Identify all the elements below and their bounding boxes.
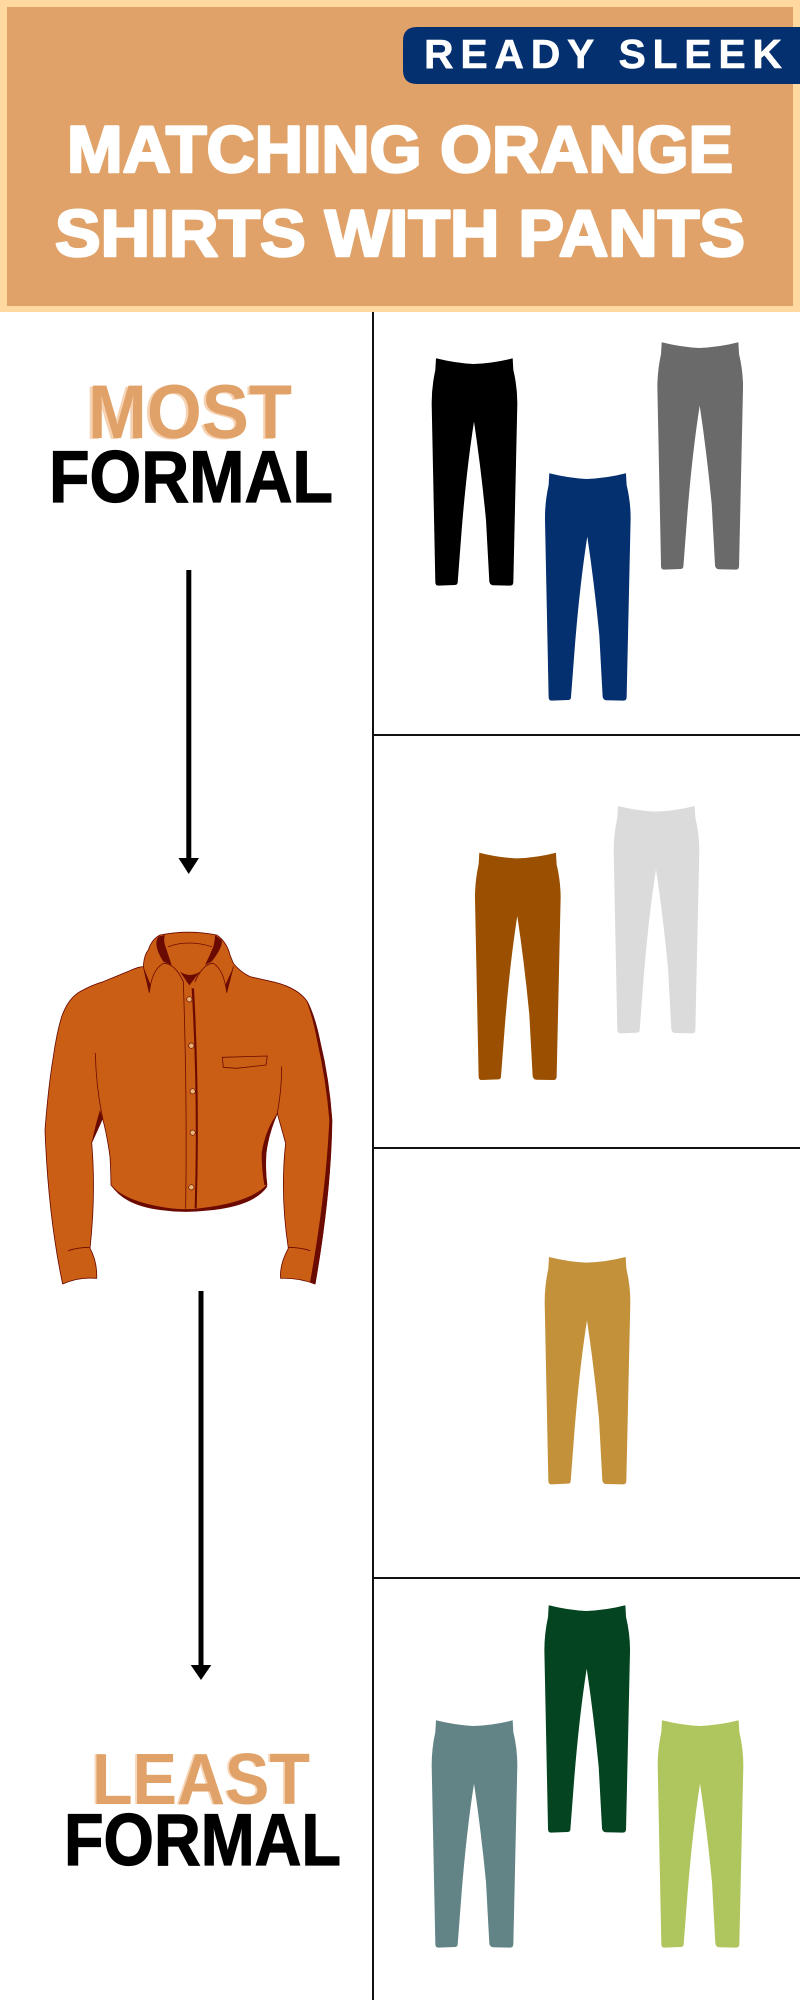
panel: business casual pants — [475, 806, 699, 1080]
title: MATCHING ORANGE — [67, 112, 733, 186]
icon: grey pants — [657, 342, 743, 570]
panel divider lines — [372, 312, 800, 2000]
panel: smart casual pants — [545, 1257, 630, 1484]
title — [55, 112, 745, 270]
heading: most formal: MOST — [85, 371, 290, 456]
shirt body — [45, 932, 332, 1284]
panel: most formal pants — [432, 342, 743, 701]
heading: most formal: MOST — [88, 370, 292, 455]
shirt buttons — [187, 997, 195, 1190]
shirt shading and seams — [92, 935, 332, 1284]
icon: brown pants — [475, 853, 561, 1080]
arrow: top down to shirt — [178, 570, 199, 874]
arrow: shirt down to least formal — [191, 1291, 211, 1680]
icon: lime pants — [658, 1720, 743, 1948]
brand badge: READY SLEEK — [424, 31, 782, 77]
heading: least formal — [64, 1740, 341, 1881]
heading: least formal: LEAST — [90, 1740, 308, 1820]
icon: teal pants — [432, 1720, 517, 1948]
icon: black pants — [432, 358, 517, 586]
heading: least formal: FORMAL — [64, 1800, 341, 1881]
icon: navy pants — [545, 473, 631, 701]
icon: light grey pants — [614, 806, 699, 1033]
heading: most formal — [49, 370, 333, 518]
panel: least formal pants — [432, 1605, 743, 1948]
icon: dark green pants — [544, 1605, 630, 1833]
title: SHIRTS WITH PANTS — [55, 196, 745, 270]
heading: most formal: FORMAL — [49, 437, 333, 518]
heading: least formal: LEAST — [92, 1740, 310, 1820]
icon: orange dress shirt — [45, 932, 332, 1284]
panel: header banner — [0, 0, 800, 312]
icon: tan pants — [545, 1257, 630, 1484]
